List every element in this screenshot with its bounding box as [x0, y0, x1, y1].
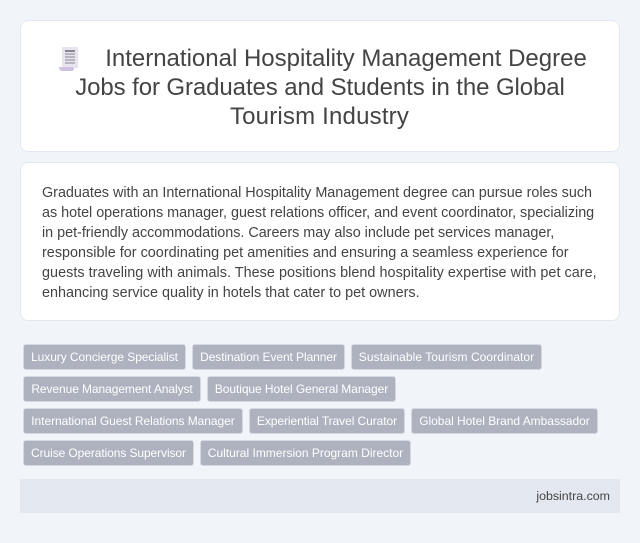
footer text: jobsintra.com: [536, 489, 610, 503]
tag: Global Hotel Brand Ambassador: [419, 414, 590, 428]
tag: [207, 376, 396, 402]
heading: International Hospitality Management Degree: [105, 45, 587, 72]
heading: [75, 45, 587, 130]
tag: [192, 344, 345, 370]
tag: Cruise Operations Supervisor: [31, 446, 186, 460]
tag: Destination Event Planner: [200, 350, 337, 364]
icon: document scroll: [59, 47, 78, 71]
text block: description: guests traveling with animals. These positions blend hospitality expertise with pet care,: [42, 265, 597, 281]
heading: Jobs for Graduates and Students in the Global: [75, 74, 565, 101]
text block: description: Graduates with an International Hospitality Management degree can pursue roles such: [42, 185, 592, 201]
text block: description: enhancing service quality in hotels that cater to pet owners.: [42, 285, 420, 301]
text block: description: responsible for coordinating pet amenities and ensuring a seamless experience for: [42, 245, 569, 261]
heading: Tourism Industry: [230, 103, 409, 130]
text block: description: as hotel operations manager, guest relations officer, and event coordinator, specializing: [42, 205, 594, 221]
tag: [351, 344, 542, 370]
panel: job tags: [23, 344, 598, 466]
text block: description: in pet-friendly accommodations. Careers may also include pet services manager,: [42, 225, 554, 241]
tag: [23, 344, 186, 370]
tag: Cultural Immersion Program Director: [208, 446, 403, 460]
tag: International Guest Relations Manager: [31, 414, 235, 428]
panel: title card: [20, 20, 620, 152]
tag: [411, 408, 598, 434]
footer bar: [20, 479, 620, 513]
tag: [23, 440, 194, 466]
panel: description: [20, 162, 620, 321]
tag: Luxury Concierge Specialist: [31, 350, 178, 364]
tag: Sustainable Tourism Coordinator: [359, 350, 534, 364]
text block: description: [42, 185, 597, 301]
tag: Revenue Management Analyst: [31, 382, 193, 396]
tag: Experiential Travel Curator: [257, 414, 397, 428]
tag: [23, 376, 201, 402]
tag: [200, 440, 411, 466]
tag: [23, 408, 243, 434]
tag: [249, 408, 405, 434]
tag: Boutique Hotel General Manager: [215, 382, 388, 396]
